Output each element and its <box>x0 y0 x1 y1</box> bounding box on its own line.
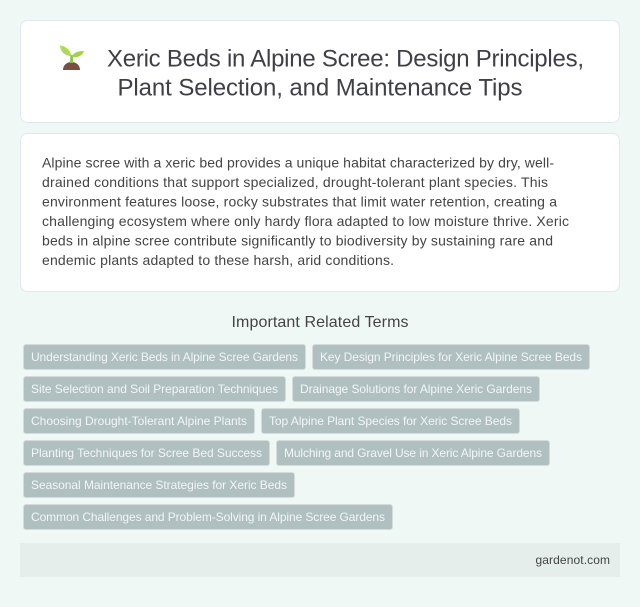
tag 1: Understanding Xeric Beds in Alpine Scree Gardens <box>31 350 298 364</box>
panel: intro paragraph: drained conditions that support specialized, drought-tolerant plant species. This <box>42 174 548 190</box>
tag 1 <box>24 344 306 370</box>
footer bar <box>20 543 620 577</box>
tag 8: Mulching and Gravel Use in Xeric Alpine Gardens <box>284 446 542 460</box>
panel: intro paragraph: beds in alpine scree contribute significantly to biodiversity by sustaining rare and <box>42 232 553 248</box>
icon: seedling <box>60 46 84 70</box>
panel: intro paragraph: Alpine scree with a xeric bed provides a unique habitat characterized by dry, well- <box>42 154 554 170</box>
tag 3: Site Selection and Soil Preparation Techniques <box>31 382 278 396</box>
tag 10: Common Challenges and Problem-Solving in Alpine Scree Gardens <box>31 510 385 524</box>
tag 4 <box>292 376 540 402</box>
tag 2: Key Design Principles for Xeric Alpine Scree Beds <box>320 350 582 364</box>
tag 9: Seasonal Maintenance Strategies for Xeric Beds <box>31 478 287 492</box>
related terms tags <box>24 344 590 530</box>
tag 2 <box>312 344 590 370</box>
title text: Xeric Beds in Alpine Scree: Design Principles, <box>107 46 584 72</box>
tag 6 <box>262 408 520 434</box>
title text <box>107 46 584 102</box>
tag 5 <box>24 408 254 434</box>
panel: intro paragraph: endemic plants adapted to these harsh, arid conditions. <box>42 252 394 268</box>
tag 4: Drainage Solutions for Alpine Xeric Gardens <box>300 382 532 396</box>
panel: intro paragraph: environment features loose, rocky substrates that limit water retention, creating a <box>42 194 557 210</box>
tag 6: Top Alpine Plant Species for Xeric Scree Beds <box>269 414 512 428</box>
heading: important related terms: Important Related Terms <box>232 314 408 331</box>
panel: intro paragraph <box>20 134 620 292</box>
tag 8 <box>276 440 550 466</box>
tag 7: Planting Techniques for Scree Bed Success <box>31 446 262 460</box>
panel: title header <box>20 20 620 122</box>
tag 10 <box>24 504 392 530</box>
footer bar: gardenot.com <box>536 553 610 567</box>
tag 9 <box>24 472 294 498</box>
panel: intro paragraph: challenging ecosystem where only hardy flora adapted to low moisture thrive. Xeric <box>42 213 569 229</box>
tag 3 <box>24 376 286 402</box>
tag 7 <box>24 440 270 466</box>
tag 5: Choosing Drought-Tolerant Alpine Plants <box>31 414 247 428</box>
title text: Plant Selection, and Maintenance Tips <box>118 74 522 102</box>
